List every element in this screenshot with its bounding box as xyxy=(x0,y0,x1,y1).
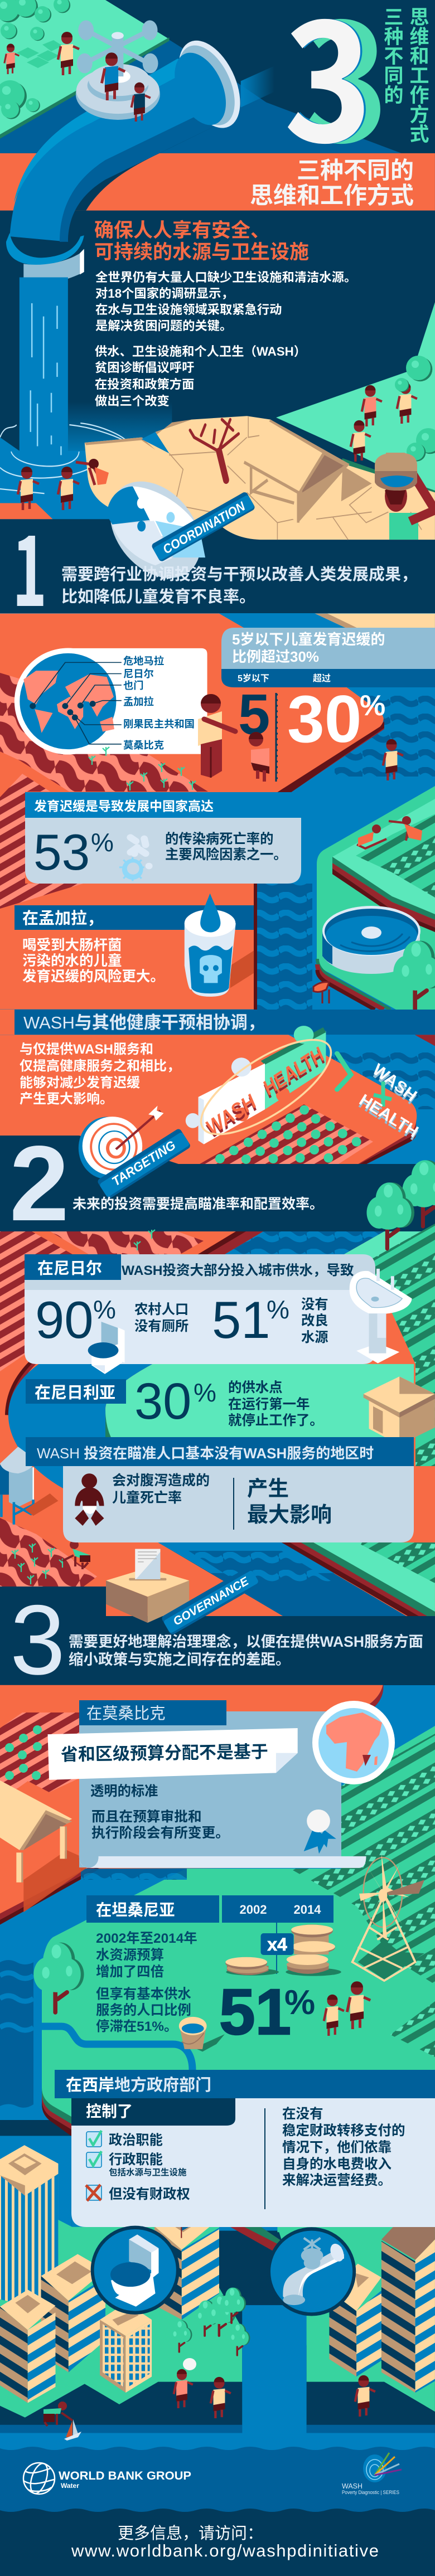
section 1 text: 需要跨行业协调投资与干预以改善人类发展成果， xyxy=(61,565,417,584)
panel: Bangladesh: 发育迟缓的风险更大。 xyxy=(22,968,165,984)
panel: stunting 30 percent xyxy=(198,628,435,782)
coordination banner: COORDINATION xyxy=(160,498,248,557)
panel: WASH plus health section background: 能够对减少发育迟缓 xyxy=(20,1075,140,1090)
panel: WASH plus health section background: 与仅提供WASH服务和 xyxy=(20,1042,153,1057)
panel: Niger: % xyxy=(267,1295,289,1324)
section 3 text: 缩小政策与实施之间存在的差距。 xyxy=(69,1651,290,1668)
crop fields xyxy=(290,1734,435,1985)
footer link: www.worldbank.org/washpdinitiative xyxy=(71,2541,379,2560)
paper roll xyxy=(79,1852,366,1868)
panel: diarrhoea mortality xyxy=(26,1437,414,1542)
vertical title: 思维和工作方式 xyxy=(407,7,429,143)
checklist xyxy=(86,2131,190,2202)
WASH + HEALTH block label xyxy=(356,1060,422,1141)
targeting banner: TARGETING xyxy=(109,1138,178,1188)
water tower xyxy=(0,1447,58,1525)
panel: Nigeria: 在运行第一年 xyxy=(228,1397,310,1412)
icon: toilet badge xyxy=(91,2226,180,2315)
panel: Mozambique: 执行阶段会有所变更。 xyxy=(91,1825,229,1841)
stat 30 percent: 30 xyxy=(134,1373,191,1430)
country labels: 孟加拉 xyxy=(123,696,154,707)
panel: Bangladesh xyxy=(14,894,254,997)
intro text: 对18个国家的调研显示， xyxy=(95,286,234,300)
WASH + HEALTH block label: HEALTH xyxy=(356,1091,422,1141)
subtitle xyxy=(94,220,309,263)
logo: World Bank Group: Water xyxy=(61,2482,79,2490)
panel: Tanzania xyxy=(33,1854,424,2051)
panel: diarrhoea mortality: 产生 xyxy=(247,1477,289,1500)
panel: 53 percent infectious disease xyxy=(25,792,301,884)
panel: Mozambique: 在莫桑比克 xyxy=(86,1704,165,1722)
puzzle: WASH plus HEALTH: WASH xyxy=(202,1090,260,1139)
stat 90 percent: 90 xyxy=(35,1291,94,1349)
panel: West Bank: 在西岸地方政府部门 xyxy=(66,2076,211,2094)
navy band 3 xyxy=(0,1587,435,1685)
stat 30 percent: 30 xyxy=(287,682,361,756)
heading WASH and health: WASH与其他健康干预相协调， xyxy=(23,1013,265,1032)
intro text: 做出三个改变 xyxy=(95,394,170,408)
farm platform xyxy=(317,786,435,1010)
icon: coin stacks xyxy=(225,1924,341,1976)
icon: ballot box xyxy=(106,1549,189,1623)
navy band 2 xyxy=(0,1136,435,1231)
section 2 trees xyxy=(367,1160,435,1249)
panel: Nigeria: % xyxy=(194,1378,216,1407)
panel: West Bank: 稳定财政转移支付的 xyxy=(282,2123,405,2138)
country labels: 也门 xyxy=(123,680,144,691)
icon: windmill xyxy=(352,1854,424,1981)
logo: WASH Poverty Diagnostic: Poverty Diagnostic | SERIES xyxy=(342,2490,399,2496)
stat 53: 53 xyxy=(33,824,90,881)
icon: toilet xyxy=(88,1322,125,1374)
tap valve and handle xyxy=(76,20,160,120)
hero scene: giant tap over cracked land xyxy=(0,0,435,598)
governance banner xyxy=(161,1566,260,1636)
panel: Bangladesh: 污染的水的儿童 xyxy=(22,953,122,969)
section 1 text xyxy=(61,565,417,606)
icon: puzzle disc xyxy=(96,462,214,598)
WASH + HEALTH block label: WASH xyxy=(369,1060,420,1105)
panel: diarrhoea mortality: 会对腹泻造成的 xyxy=(112,1473,210,1488)
icon: bucket xyxy=(179,2017,225,2051)
numeral 2: 2 xyxy=(9,1123,69,1243)
icon: medal xyxy=(304,1809,336,1854)
orange heading: 思维和工作方式 xyxy=(250,182,414,208)
country labels: 尼日尔 xyxy=(123,668,154,680)
stat 51 percent: 51 xyxy=(219,1976,291,2048)
panel: diarrhoea mortality: WASH 投资在瞄准人口基本没有WASH服务的地区时 xyxy=(37,1445,374,1462)
icon: germs xyxy=(119,837,153,881)
intro text: 在投资和政策方面 xyxy=(95,377,194,391)
country labels: 危地马拉 xyxy=(123,655,164,667)
panel: Nigeria xyxy=(26,1373,435,1445)
city trees xyxy=(170,2288,250,2355)
section 3 text xyxy=(69,1633,423,1668)
panel: Niger: 水源 xyxy=(301,1330,328,1345)
children xyxy=(324,1981,370,2036)
panel: Niger: WASH投资大部分投入城市供水，导致 xyxy=(122,1262,354,1278)
section 2 text: 未来的投资需要提高瞄准率和配置效率。 xyxy=(72,1196,323,1212)
country labels xyxy=(123,655,195,751)
panel: Tanzania: 水资源预算 xyxy=(96,1948,164,1963)
intro text: 是解决贫困问题的关键。 xyxy=(95,319,232,333)
vertical title xyxy=(381,7,429,143)
section 3 text: 需要更好地理解治理理念，以便在提供WASH服务方面 xyxy=(69,1633,423,1650)
panel: diarrhoea mortality: 最大影响 xyxy=(247,1503,332,1527)
panel: Tanzania: 增加了四倍 xyxy=(96,1964,164,1980)
green hillside xyxy=(276,302,435,492)
country labels: 刚果民主共和国 xyxy=(123,718,195,730)
subtitle: 可持续的水源与卫生设施 xyxy=(94,241,309,263)
panel: West Bank: 自身的水电费收入 xyxy=(282,2156,392,2172)
icon: tap badge xyxy=(267,2227,356,2316)
intro text xyxy=(95,270,356,408)
governance banner: GOVERNANCE xyxy=(171,1574,252,1628)
panel: 53 percent infectious disease: 的传染病死亡率的 xyxy=(165,832,273,847)
stream xyxy=(35,2026,192,2070)
numeral 3: 3 xyxy=(10,1584,65,1695)
panel: Niger: % xyxy=(93,1295,116,1324)
panel: Niger: 在尼日尔 xyxy=(37,1259,102,1278)
stat 5: 5 xyxy=(238,682,270,746)
panel: Bangladesh: 在孟加拉， xyxy=(22,909,103,928)
panel: stunting 30 percent: 比例超过30% xyxy=(232,648,319,665)
icon: globe with Africa xyxy=(312,1701,395,1784)
orange heading: 三种不同的 xyxy=(297,157,414,183)
section 1 text: 比如降低儿童发育不良率。 xyxy=(61,588,255,606)
targeting banner xyxy=(96,1128,191,1200)
globe map panel xyxy=(14,648,207,755)
paper ribbon xyxy=(48,1728,298,1780)
panel: city foreground xyxy=(0,2117,435,2451)
panel: Mozambique: 省和区级预算分配不是基于 xyxy=(61,1742,268,1764)
panel: West Bank xyxy=(55,2070,435,2227)
intro text: 在水与卫生设施领域采取紧急行动 xyxy=(95,303,282,317)
ruler xyxy=(276,693,278,782)
logo: WASH Poverty Diagnostic xyxy=(342,2453,402,2496)
icon: sink xyxy=(350,1269,412,1363)
checklist: 包括水源与卫生设施 xyxy=(109,2167,187,2177)
panel: Bangladesh: 喝受到大肠杆菌 xyxy=(22,938,122,953)
panel: stunting 30 percent: % xyxy=(360,690,385,722)
panel: Nigeria: 在尼日利亚 xyxy=(35,1384,115,1402)
panel: governance scenery xyxy=(0,1685,435,2136)
panel: Tanzania: % xyxy=(284,1983,315,2022)
panel: WASH plus health section background xyxy=(0,1010,435,1243)
panel: Tanzania: 2002年至2014年 xyxy=(96,1931,197,1946)
x4 badge xyxy=(261,1933,293,1955)
subtitle: 确保人人享有安全、 xyxy=(94,220,270,241)
footer water bands xyxy=(0,2447,435,2576)
panel: Niger xyxy=(25,1254,412,1374)
logo: World Bank Group: WORLD BANK GROUP xyxy=(59,2469,191,2482)
panel: Tanzania: 服务的人口比例 xyxy=(96,2003,191,2018)
panel: lower section background xyxy=(0,1224,435,1616)
panel: Niger: 改良 xyxy=(301,1313,328,1328)
footer link: 更多信息，请访问： xyxy=(118,2524,263,2543)
panel: stunting 30 percent: 超过 xyxy=(313,673,331,683)
panel: WASH plus health section background: 仅提高健康服务之和相比， xyxy=(20,1058,180,1074)
person carrying water pot xyxy=(375,453,435,540)
icon: target xyxy=(79,1105,163,1179)
panel: Tanzania: 在坦桑尼亚 xyxy=(96,1901,175,1919)
numeral 1: 1 xyxy=(12,496,47,633)
icon: glass with skull xyxy=(185,894,254,997)
logo: WASH Poverty Diagnostic: WASH xyxy=(342,2482,362,2490)
panel: Nigeria: 就停止工作了。 xyxy=(228,1413,323,1428)
x4 badge: x4 xyxy=(267,1934,287,1954)
orange heading xyxy=(250,157,414,208)
adult and child measuring height xyxy=(198,694,269,782)
farmer crouching xyxy=(62,1540,90,1569)
vertical title: 三种不同的 xyxy=(381,7,403,104)
panel: stunting 30 percent: 5岁以下儿童发育迟缓的 xyxy=(232,631,385,648)
icon: hut xyxy=(364,1376,435,1445)
checklist: 行政职能 xyxy=(109,2152,163,2167)
panel: section 1 background xyxy=(0,613,435,1011)
country labels: 莫桑比克 xyxy=(123,739,164,751)
panel: Mozambique xyxy=(48,1700,395,1868)
city people xyxy=(44,2358,375,2441)
hut on orange xyxy=(0,1781,94,1912)
intro text: 贫困诊断倡议呼吁 xyxy=(95,361,194,375)
panel: Niger: 农村人口 xyxy=(134,1302,188,1317)
panel: 53 percent infectious disease: 发育迟缓是导致发展中国家高达 xyxy=(34,799,214,813)
panel: stunting 30 percent: 5岁以下 xyxy=(238,673,269,683)
panel: 53 percent infectious disease: % xyxy=(91,828,114,857)
panel: West Bank: 来解决运营经费。 xyxy=(282,2172,392,2188)
cracked earth xyxy=(85,416,435,540)
panel: diarrhoea mortality: 儿童死亡率 xyxy=(112,1490,182,1506)
puzzle: WASH plus HEALTH: HEALTH xyxy=(259,1043,328,1099)
intro text: 供水、卫生设施和个人卫生（WASH） xyxy=(95,345,306,358)
panel: Tanzania: 2002 xyxy=(240,1903,267,1917)
panel: Tanzania: 停滞在51%。 xyxy=(96,2019,177,2034)
footer link xyxy=(71,2524,379,2560)
logo: World Bank Group xyxy=(23,2461,191,2496)
intro text: 全世界仍有大量人口缺少卫生设施和清洁水源。 xyxy=(95,270,356,284)
panel: Niger: 没有厕所 xyxy=(134,1319,188,1334)
panel: Tanzania: 但享有基本供水 xyxy=(96,1987,191,2002)
person wading xyxy=(383,739,403,780)
panel: Mozambique: 而且在预算审批和 xyxy=(91,1809,202,1825)
panel: West Bank: 在没有 xyxy=(282,2106,323,2122)
puzzle: WASH plus HEALTH xyxy=(186,1023,351,1151)
stat 51 percent: 51 xyxy=(212,1291,270,1349)
panel: West Bank: 情况下，他们依靠 xyxy=(282,2140,392,2155)
panel: 53 percent infectious disease: 主要风险因素之一。 xyxy=(165,847,287,862)
panel: Tanzania: 2014 xyxy=(294,1903,321,1917)
panel: West Bank: 控制了 xyxy=(86,2103,133,2120)
checklist: 但没有财政权 xyxy=(109,2187,190,2202)
panel: Mozambique: 透明的标准 xyxy=(90,1784,158,1799)
icon: infant xyxy=(75,1473,104,1526)
water column xyxy=(0,1960,33,2108)
water tank xyxy=(313,906,420,1003)
checklist: 政治职能 xyxy=(109,2133,163,2148)
panel: Nigeria: 的供水点 xyxy=(228,1380,283,1395)
panel: WASH plus health section background: 产生更大影响。 xyxy=(20,1091,113,1107)
panel: Niger: 没有 xyxy=(301,1297,328,1312)
